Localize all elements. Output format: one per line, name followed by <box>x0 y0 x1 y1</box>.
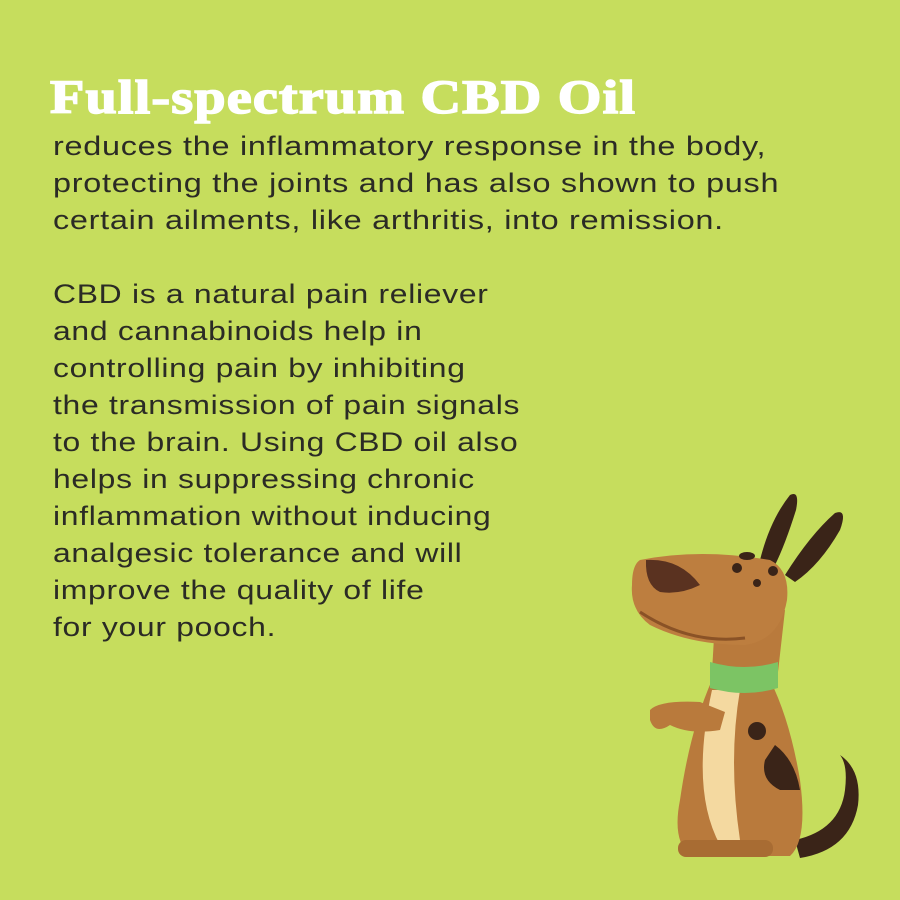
paragraph 2: controlling pain by inhibiting <box>53 353 466 383</box>
belly <box>703 690 740 845</box>
head <box>632 554 787 645</box>
neck <box>712 610 785 672</box>
paragraph 1: certain ailments, like arthritis, into remission. <box>53 205 724 235</box>
spots <box>748 722 766 740</box>
paws <box>650 702 725 732</box>
paragraph 2: for your pooch. <box>53 612 276 642</box>
paragraph 1: protecting the joints and has also shown to push <box>53 168 779 198</box>
paragraph 2: analgesic tolerance and will <box>53 538 462 568</box>
paragraph 2 <box>53 279 520 642</box>
ears <box>760 494 797 565</box>
paragraph 1: reduces the inflammatory response in the body, <box>53 131 766 161</box>
nose <box>646 560 700 593</box>
feet <box>678 840 773 857</box>
collar <box>710 662 778 693</box>
head dots <box>732 563 742 573</box>
paragraph 2: CBD is a natural pain reliever <box>53 279 489 309</box>
paragraph 2: to the brain. Using CBD oil also <box>53 427 518 457</box>
paragraph 2: and cannabinoids help in <box>53 316 423 346</box>
paragraph 2: improve the quality of life <box>53 575 425 605</box>
tail <box>795 755 859 858</box>
paragraph 2: helps in suppressing chronic <box>53 464 475 494</box>
paragraph 2: the transmission of pain signals <box>53 390 520 420</box>
body <box>678 680 802 856</box>
paragraph 2: inflammation without inducing <box>53 501 491 531</box>
title: Full-spectrum CBD Oil <box>50 71 636 124</box>
paragraph 1 <box>53 131 779 235</box>
